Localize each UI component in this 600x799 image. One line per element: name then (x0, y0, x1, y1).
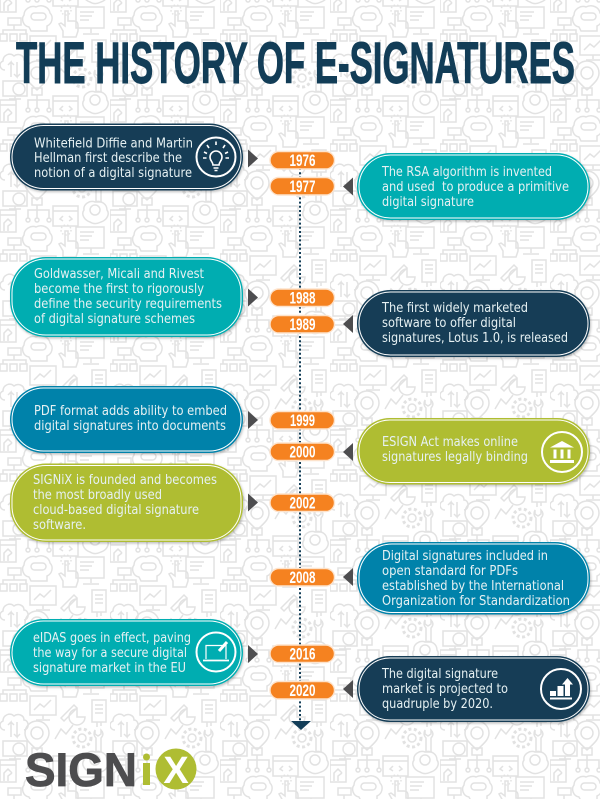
icon: light bulb (196, 138, 236, 176)
panel: 1999 PDF format (10, 386, 243, 453)
panel: 2008 open standard: Digital signatures included in (382, 549, 548, 564)
year 1977: 1977 (290, 178, 316, 196)
panel: 2008 open standard: established by the International (382, 579, 564, 594)
panel: 2020 market projection (357, 656, 590, 722)
panel: 1976 Diffie and Hellman: Hellman first describe the (34, 151, 182, 166)
year 1976 (270, 152, 334, 170)
year 2000 (270, 443, 334, 462)
year 2002: 2002 (290, 494, 316, 512)
panel: 1989 Lotus: signatures, Lotus 1.0, is released (382, 331, 568, 346)
year 2020 (270, 682, 334, 700)
pointer arrows (248, 150, 353, 698)
year 2016 (270, 645, 334, 664)
year 2002 (270, 494, 334, 512)
year pills (270, 152, 334, 700)
panel: 1988 security requirements (10, 257, 243, 337)
panel: 1988 security requirements: Goldwasser, Micali and Rivest (34, 267, 204, 282)
panel: 2008 open standard (357, 542, 590, 614)
panel: 2002 SIGNiX founded: the most broadly used (33, 488, 162, 503)
panel: 2002 SIGNiX founded (10, 464, 243, 542)
panel: 1976 Diffie and Hellman: notion of a digital signature (34, 166, 192, 181)
panel: 2000 ESIGN Act: ESIGN Act makes online (382, 435, 518, 450)
year 1999 (270, 412, 334, 430)
panel: 1976 Diffie and Hellman (10, 124, 243, 190)
year 2000: 2000 (290, 444, 316, 462)
year 1999: 1999 (290, 412, 315, 430)
panel: 1999 PDF format: digital signatures into documents (34, 419, 226, 434)
panel: 2008 open standard: open standard for PDFs (382, 564, 518, 579)
panel: 2000 ESIGN Act: signatures legally binding (382, 450, 528, 465)
panel: 1999 PDF format: PDF format adds ability to embed (34, 404, 227, 419)
year 2016: 2016 (290, 646, 316, 664)
panel: 2008 open standard: Organization for Standardization (382, 594, 570, 609)
year 2020: 2020 (290, 682, 316, 700)
year 1976: 1976 (290, 152, 316, 170)
year 2008 (270, 568, 334, 587)
panel: 2020 market projection: market is projected to (382, 682, 508, 697)
icon: laptop and pen (196, 632, 236, 672)
panel: 1989 Lotus (357, 290, 590, 357)
logo: SIGNiX: SIGN (25, 743, 137, 796)
year 2008: 2008 (290, 569, 316, 587)
panel: 1977 RSA algorithm: digital signature (382, 195, 474, 210)
logo: SIGNiX (25, 743, 196, 796)
icon: government building (542, 432, 582, 472)
panel: 2020 market projection: quadruple by 2020. (382, 697, 493, 712)
panel: 1988 security requirements: of digital signature schemes (34, 312, 195, 327)
panel: 2016 eIDAS: the way for a secure digital (33, 646, 187, 661)
year 1989 (270, 316, 334, 334)
logo: SIGNiX: X (163, 750, 189, 792)
panel: 2016 eIDAS (10, 619, 243, 686)
panel: 1977 RSA algorithm (357, 153, 590, 220)
panel: 2016 eIDAS: signature market in the EU (33, 661, 186, 676)
year 1989: 1989 (290, 316, 316, 334)
panel: 1977 RSA algorithm: and used to produce a primitive (382, 180, 569, 195)
panel: 2000 ESIGN Act (357, 418, 590, 484)
panel: 1989 Lotus: software to offer digital (382, 316, 516, 331)
panel: 2016 eIDAS: eIDAS goes in effect, paving (33, 631, 191, 646)
panel: 1989 Lotus: The first widely marketed (381, 301, 528, 316)
panel: 1988 security requirements: become the first to rigorously (34, 282, 204, 297)
year 1988: 1988 (290, 290, 316, 308)
panel: 2002 SIGNiX founded: software. (33, 518, 86, 533)
year 1977 (270, 178, 334, 196)
year 1988 (270, 289, 334, 308)
panel: 1988 security requirements: define the security requirements (34, 297, 222, 312)
panel: 2002 SIGNiX founded: SIGNiX is founded and becomes (33, 473, 217, 488)
panel: 2020 market projection: The digital signature (381, 667, 498, 682)
panel: 1976 Diffie and Hellman: Whitefield Diffie and Martin (34, 136, 193, 152)
panel: 1977 RSA algorithm: The RSA algorithm is invented (381, 165, 552, 180)
timeline end arrow (291, 721, 311, 730)
panel: 2002 SIGNiX founded: cloud-based digital signature (33, 503, 199, 518)
icon: rising bar chart (541, 669, 581, 709)
timeline dotted line (299, 168, 301, 722)
